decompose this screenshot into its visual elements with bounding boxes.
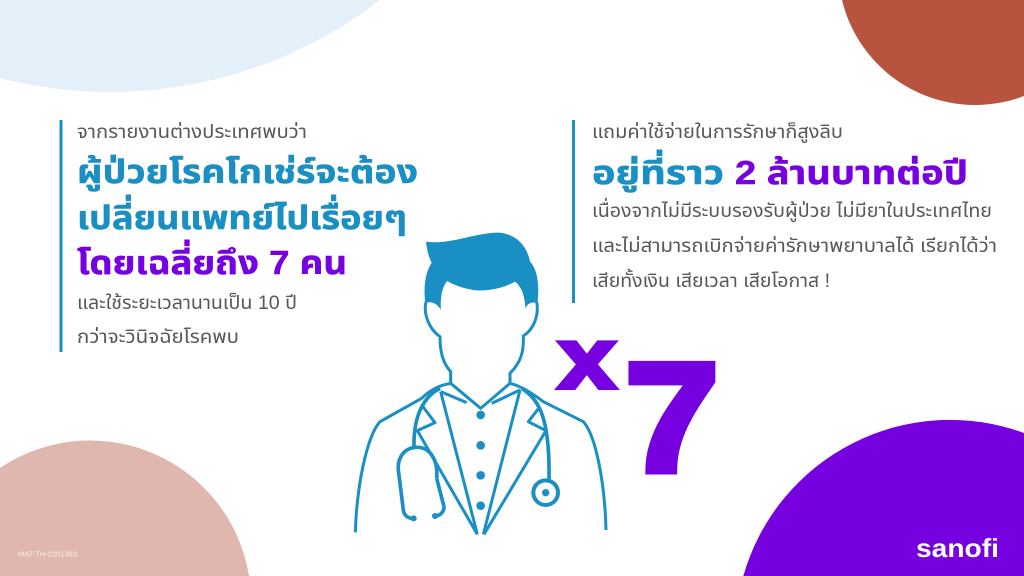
background circle: top left blue: [0, 0, 380, 92]
left text block: [77, 120, 418, 348]
letter x: x: [558, 311, 616, 407]
right heading blue part: อยู่ที่ราว: [592, 149, 724, 193]
multiplier x7: [558, 311, 719, 504]
left heading line 3: โดยเฉลี่ยถึง 7 คน: [77, 239, 347, 281]
digit 7: 7: [625, 331, 719, 504]
left body line 2: กว่าจะวินิจฉัยโรคพบ: [77, 325, 239, 348]
background circle: bottom right purple: [743, 420, 1024, 576]
document code: MAT-TH-2201383: [18, 552, 77, 558]
doctor hair: [425, 233, 538, 310]
left accent bar: [60, 120, 62, 352]
stethoscope chest piece: [533, 480, 558, 505]
stethoscope tubes: [414, 388, 549, 480]
left heading line 1: ผู้ป่วยโรคโกเช่ร์จะต้อง: [77, 153, 418, 192]
logo: sanofi: sanofi: [916, 533, 999, 563]
right text block: [592, 120, 997, 292]
right intro text: แถมค่าใช้จ่ายในการรักษาก็สูงลิบ: [592, 120, 843, 144]
left intro text: จากรายงานต่างประเทศพบว่า: [77, 120, 307, 143]
coat collar and lapels: [417, 390, 546, 534]
right accent bar: [572, 120, 575, 303]
left heading line 2: เปลี่ยนแพทย์ไปเรื่อยๆ: [77, 194, 407, 236]
icon: doctor with stethoscope: [355, 233, 606, 534]
stethoscope ear tips: [411, 513, 438, 521]
stethoscope earpieces: [398, 447, 444, 518]
right body line 2: และไม่สามารถเบิกจ่ายค่ารักษาพยาบาลได้ เรียกได้ว่า: [592, 234, 997, 257]
right heading purple part: 2 ล้านบาทต่อปี: [735, 154, 968, 191]
right body line 3: เสียทั้งเงิน เสียเวลา เสียโอกาส !: [592, 268, 830, 292]
background circle: bottom left pink: [0, 440, 249, 576]
left body line 1: และใช้ระยะเวลานานเป็น 10 ปี: [77, 291, 297, 314]
doctor coat outline: [355, 383, 606, 532]
right body line 1: เนื่องจากไม่มีระบบรองรับผู้ป่วย ไม่มียาในประเทศไทย: [592, 197, 992, 223]
doctor face outline: [425, 302, 537, 408]
coat buttons: [476, 411, 485, 510]
background circle: top right rust: [842, 0, 1024, 105]
